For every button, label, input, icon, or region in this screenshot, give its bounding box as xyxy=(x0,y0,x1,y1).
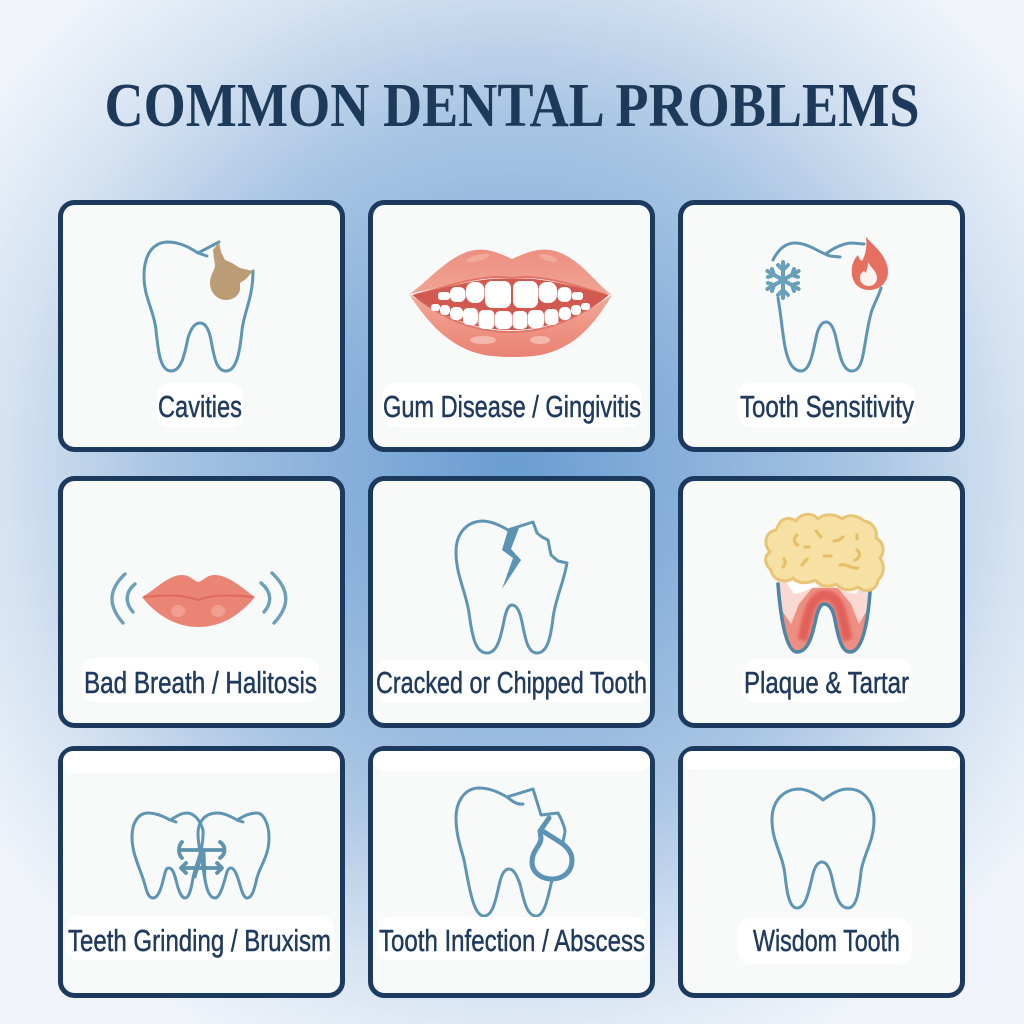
panel: cracked tooth xyxy=(370,478,652,726)
label pill: tooth sensitivity: Tooth Sensitivity xyxy=(740,389,914,424)
label pill: cracked tooth: Cracked or Chipped Tooth xyxy=(376,665,647,700)
label pill: wisdom tooth: Wisdom Tooth xyxy=(753,923,900,958)
panel: tooth infection xyxy=(370,748,652,996)
label pill: plaque and tartar: Plaque & Tartar xyxy=(744,665,909,700)
icon: lips with breath waves xyxy=(112,573,286,627)
tooth outline xyxy=(778,584,870,652)
label pill: bad breath xyxy=(82,658,319,702)
label pill: cavities: Cavities xyxy=(158,389,242,424)
label pill: teeth grinding: Teeth Grinding / Bruxism xyxy=(68,923,331,958)
panel: plaque and tartar xyxy=(680,478,962,726)
label pill: bad breath: Bad Breath / Halitosis xyxy=(84,665,317,700)
panel: teeth grinding xyxy=(60,748,342,996)
icon: sensitive tooth xyxy=(767,237,888,371)
label pill: teeth grinding xyxy=(66,916,334,960)
label pill: wisdom tooth xyxy=(737,918,912,964)
label pill: cavities xyxy=(157,383,243,427)
breath waves xyxy=(112,573,286,623)
label pill: tooth infection: Tooth Infection / Abscess xyxy=(379,923,645,958)
icon: two grinding teeth xyxy=(132,813,269,898)
icon: smiling lips with teeth xyxy=(409,250,612,357)
panel: tooth sensitivity xyxy=(680,202,962,450)
mouth interior xyxy=(412,278,609,330)
grinding arrows xyxy=(179,842,224,880)
icon: tooth with cavity xyxy=(144,242,253,371)
panel: wisdom tooth xyxy=(680,748,962,996)
label pill: tooth sensitivity xyxy=(738,383,915,427)
tooth roots xyxy=(778,581,868,650)
label pill: tooth infection xyxy=(378,917,646,960)
label pill: gum disease: Gum Disease / Gingivitis xyxy=(383,389,641,424)
icon: cracked chipped tooth xyxy=(456,521,567,653)
panel: bad breath xyxy=(60,478,342,726)
title: COMMON DENTAL PROBLEMS xyxy=(104,72,920,140)
lower teeth xyxy=(431,303,590,329)
plaque blob xyxy=(766,514,883,591)
icon: wisdom tooth xyxy=(772,789,874,908)
label pill: cracked tooth xyxy=(376,660,648,702)
panel: gum disease xyxy=(370,202,652,450)
label pill: gum disease xyxy=(383,383,641,427)
icon: flame xyxy=(852,237,888,290)
upper teeth xyxy=(438,281,583,308)
panel: cavities xyxy=(60,202,342,450)
icon: snowflake xyxy=(767,262,799,298)
icon: tooth with plaque xyxy=(766,514,883,655)
icon: tooth with abscess xyxy=(456,788,572,916)
label pill: plaque and tartar xyxy=(743,659,911,702)
